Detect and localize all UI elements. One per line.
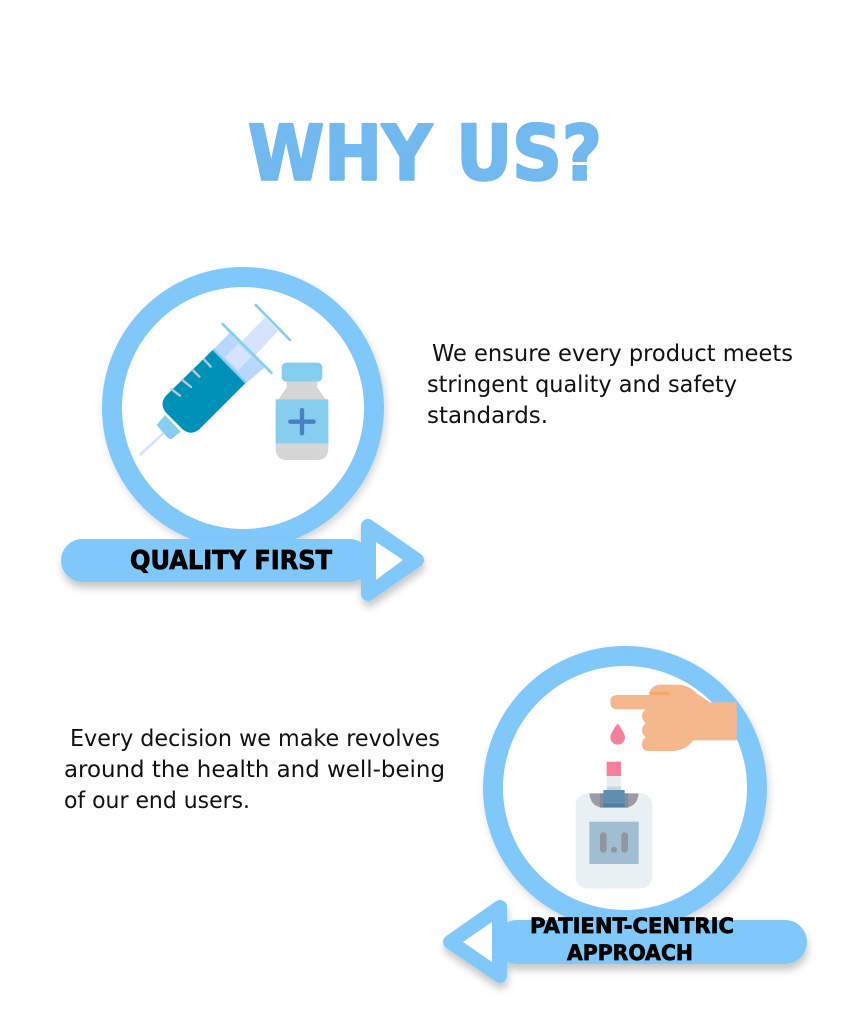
heading: quality first: QUALITY FIRST bbox=[130, 546, 332, 576]
text block: patient-centric description bbox=[64, 726, 445, 814]
text block: patient-centric description: of our end users. bbox=[64, 788, 250, 814]
text block: quality first description bbox=[427, 341, 793, 429]
text block: quality first description: stringent quality and safety bbox=[427, 372, 737, 398]
circle ring: quality first bbox=[112, 277, 374, 539]
icon: syringe bbox=[141, 305, 290, 454]
panel: quality first bbox=[61, 277, 417, 594]
text block: quality first description: We ensure every product meets bbox=[432, 341, 793, 367]
icon: vial bbox=[276, 363, 328, 460]
heading: patient-centric approach: APPROACH bbox=[567, 941, 693, 965]
text block: patient-centric description: around the health and well-being bbox=[64, 757, 445, 783]
panel: patient-centric approach bbox=[450, 656, 807, 976]
arrow: patient-centric bbox=[450, 907, 807, 976]
text block: patient-centric description: Every decision we make revolves bbox=[70, 726, 440, 752]
text block: quality first description: standards. bbox=[427, 403, 548, 429]
icon: blood drop bbox=[610, 723, 625, 745]
title: WHY US? bbox=[248, 108, 602, 198]
icon: glucose meter bbox=[576, 762, 652, 888]
arrow: quality first bbox=[61, 526, 417, 594]
heading: patient-centric approach: PATIENT-CENTRIC bbox=[530, 914, 734, 938]
circle ring: patient-centric bbox=[493, 656, 757, 920]
heading: patient-centric approach bbox=[530, 914, 734, 965]
icon: hand bbox=[610, 685, 737, 751]
